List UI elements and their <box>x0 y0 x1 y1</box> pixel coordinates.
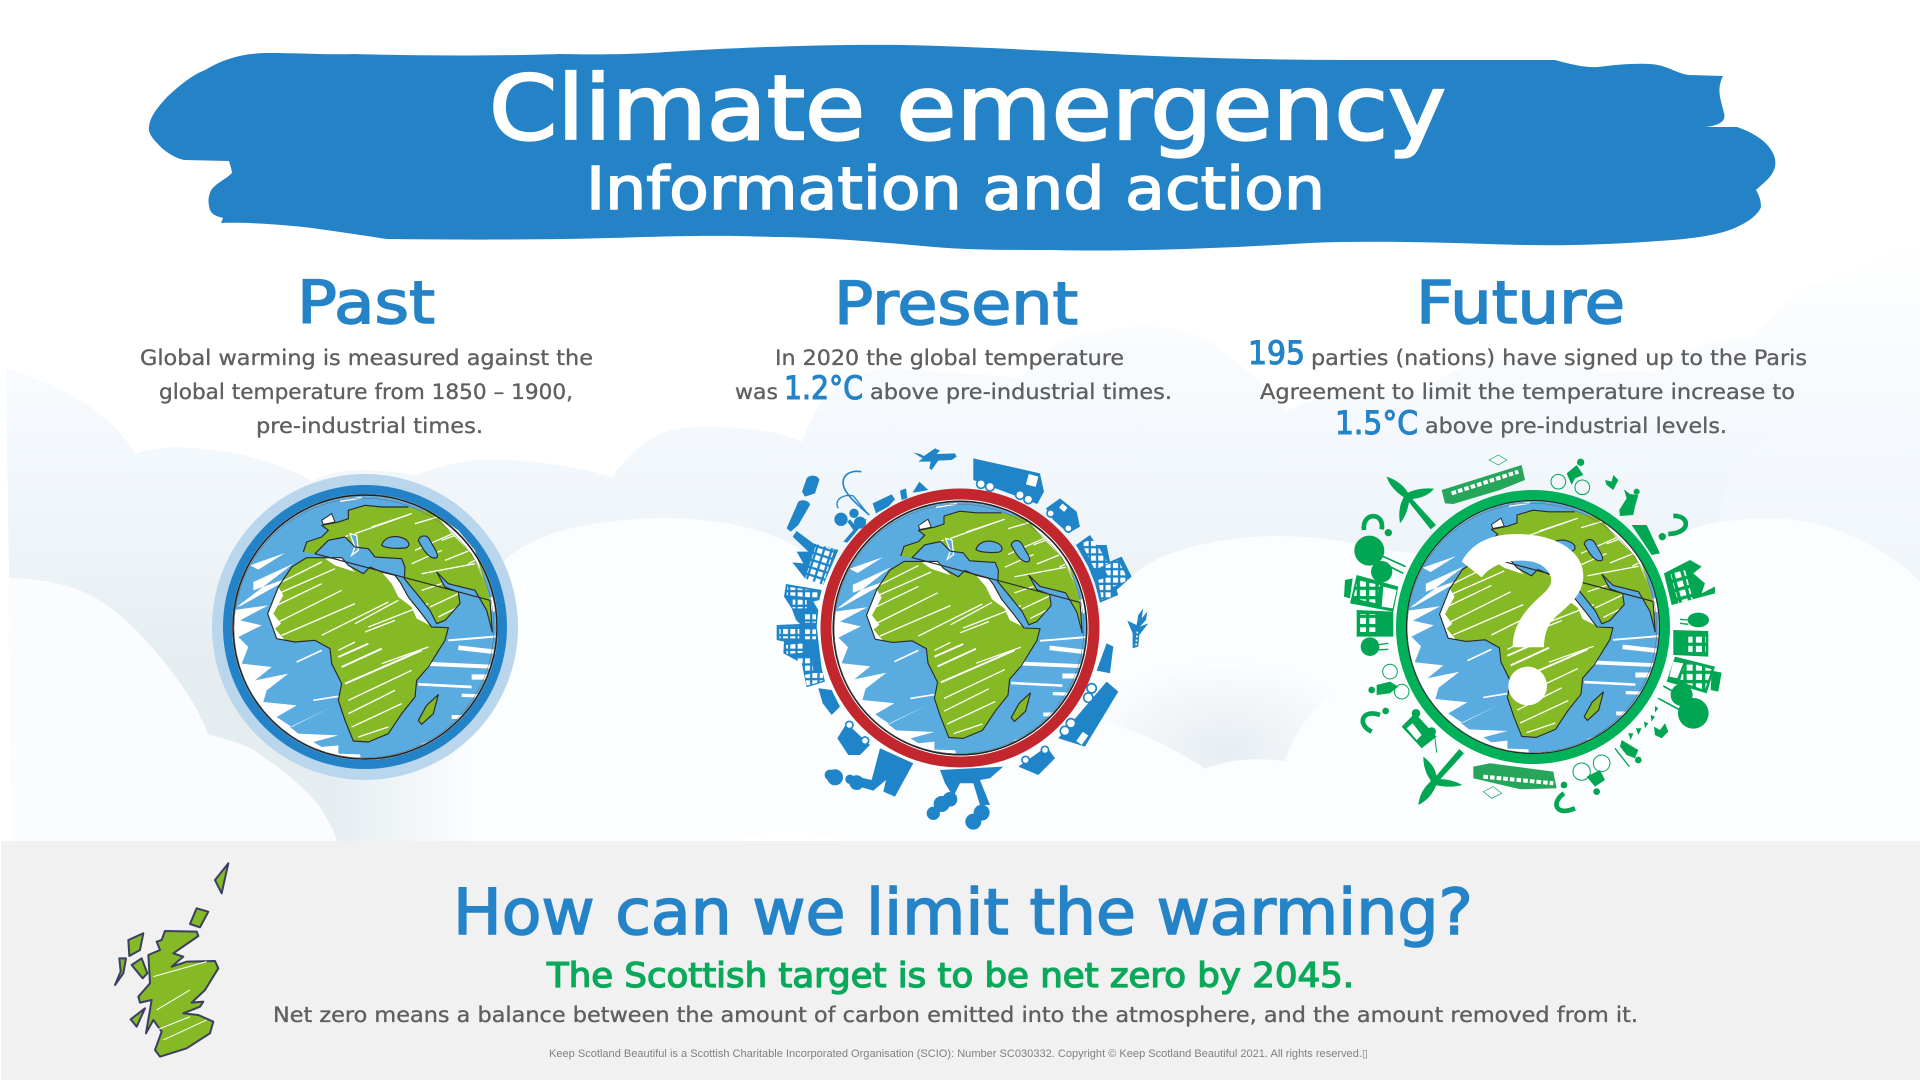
text: present description: 1.2°C <box>784 369 863 407</box>
icon: question mark upper right <box>1659 516 1686 540</box>
title banner <box>149 45 1775 251</box>
icon: building right <box>1667 630 1722 693</box>
panel: present <box>735 269 1172 830</box>
main title: Climate emergency <box>489 56 1446 160</box>
icon: street lamps and trees <box>834 471 869 543</box>
icon: bus lower right <box>1058 682 1118 747</box>
heading: present: Present <box>834 269 1078 338</box>
icon: tram top <box>1442 455 1525 504</box>
icon: person <box>1619 489 1640 516</box>
banner brush shape <box>149 45 1775 251</box>
text: present description <box>735 346 1172 407</box>
icon: plane top <box>913 448 957 470</box>
text: future description: 195 <box>1248 334 1305 372</box>
heading: how can we limit the warming: How can we limit the warming? <box>453 876 1473 949</box>
text: net zero definition: Net zero means a balance between the amount of carbon emitted into the atmosphere, and the amount removed from it. <box>273 1003 1638 1028</box>
icon: factory <box>792 531 838 586</box>
icon: smoke clouds <box>787 476 819 532</box>
text: future description: parties (nations) have signed up to the Paris <box>1311 346 1807 371</box>
icon: van right <box>1097 643 1113 673</box>
icon: inverted question mark bottom <box>1556 782 1575 811</box>
icon: buildings left <box>777 584 825 687</box>
icon: butterfly lower <box>1654 723 1668 738</box>
icon: hedge triangles <box>1628 706 1658 740</box>
text: future description: 1.5°C <box>1335 404 1418 442</box>
icon: tram bottom <box>1473 763 1557 798</box>
panel: past <box>140 268 593 780</box>
text: past description: Global warming is measured against the <box>140 346 593 371</box>
icon: tree legs bottom <box>927 767 1003 830</box>
icon: tree upper right <box>1680 613 1709 627</box>
icon: tree right <box>1658 684 1709 729</box>
text: copyright: Keep Scotland Beautiful is a Scottish Charitable Incorporated Organisation (SCIO): Number SC030332. Copyright © Keep Scotland Beautiful 2021. All rights reserved.▯ <box>549 1048 1368 1060</box>
icon: cyclist top <box>1551 459 1590 495</box>
icon: bear shape <box>1632 525 1660 555</box>
globe: present <box>826 494 1094 766</box>
text: past description: pre-industrial times. <box>256 414 483 439</box>
subtitle: Information and action <box>586 154 1325 223</box>
icon: tree large left <box>1354 536 1406 573</box>
icon: buildings right <box>1076 535 1132 603</box>
text: present description: In 2020 the global temperature <box>775 346 1124 371</box>
icon: plane right <box>1127 608 1148 648</box>
icon: white question mark <box>1462 534 1583 705</box>
text: future description: above pre-industrial levels. <box>1425 414 1727 439</box>
icon: question mark left <box>1363 708 1389 732</box>
panel: future <box>1248 268 1807 811</box>
text: present description: was <box>735 380 778 405</box>
text: past description: global temperature from 1850 – 1900, <box>159 380 573 405</box>
icon: small vehicles on top <box>873 482 928 513</box>
icon: truck <box>973 458 1044 504</box>
text: present description: above pre-industrial times. <box>870 380 1172 405</box>
icon: wind turbine bottom <box>1418 749 1464 805</box>
icon: car lower <box>1018 746 1055 775</box>
heading: future: Future <box>1416 268 1625 337</box>
icon: car left <box>837 721 870 755</box>
panel: how can we limit the warming <box>1 841 1920 1080</box>
icon: building left <box>1344 561 1398 656</box>
icon: tree legs left <box>825 748 913 797</box>
globe: future <box>1399 494 1666 765</box>
icon: butterfly upper <box>1605 475 1618 490</box>
text: future description <box>1248 334 1807 442</box>
icon: person with pram <box>1615 740 1642 767</box>
text: past description <box>140 346 593 439</box>
icon: van left <box>818 688 840 715</box>
icons: sustainable city ring <box>1344 455 1722 811</box>
icon: wind turbine top <box>1387 477 1436 529</box>
heading: past: Past <box>297 268 435 337</box>
icon: car left <box>1402 709 1437 753</box>
icon: bicycle bottom <box>1573 755 1610 795</box>
icon: car right <box>1046 498 1080 533</box>
globe: past <box>212 474 518 780</box>
icons: polluting city ring <box>777 448 1148 830</box>
text: scottish target: The Scottish target is to be net zero by 2045. <box>546 956 1354 996</box>
icon: factory <box>1664 560 1715 605</box>
icon: map of Scotland <box>115 863 228 1057</box>
icon: question mark top left <box>1364 516 1392 536</box>
text: future description: Agreement to limit the temperature increase to <box>1260 380 1795 405</box>
icon: bicycle left <box>1368 664 1409 699</box>
